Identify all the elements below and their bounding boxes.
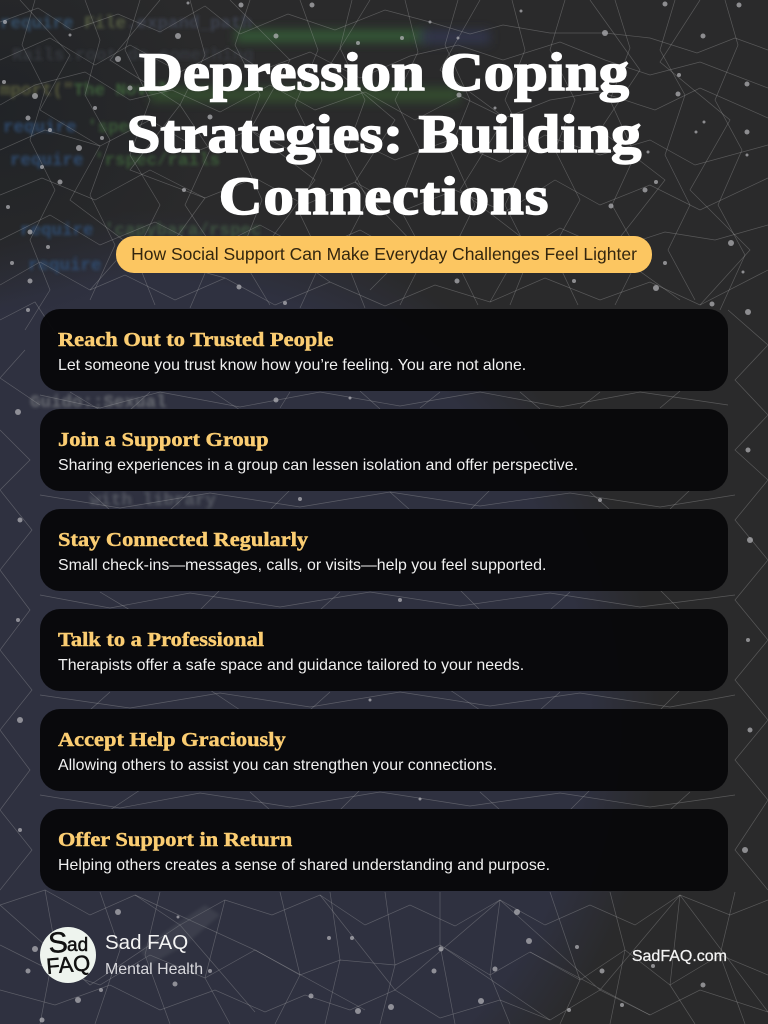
icon: Sad FAQ logo: S — [47, 927, 69, 960]
panel: accept help: Allowing others to assist you can strengthen your connections. — [58, 757, 497, 774]
panel: reach out: Let someone you trust know how you’re feeling. You are not alone. — [58, 357, 526, 374]
background: blurred code and network mesh: Rails.root do_something — [12, 46, 254, 66]
panel: offer support: Offer Support in Return — [58, 829, 292, 851]
background: blurred code and network mesh: require 'capybara/rspec — [20, 221, 262, 241]
panel: support group — [40, 409, 728, 491]
title — [127, 42, 642, 226]
panel: support group: Sharing experiences in a group can lessen isolation and offer perspective. — [58, 457, 578, 474]
panel: professional: Talk to a Professional — [58, 629, 264, 651]
background: blurred code and network mesh: require File.expand_path — [0, 14, 252, 34]
footer brand — [105, 931, 203, 978]
background: blurred code and network mesh: require — [28, 256, 102, 276]
background: blurred code and network mesh: Guido::Sexual — [30, 393, 167, 413]
subtitle pill: How Social Support Can Make Everyday Challenges Feel Lighter — [131, 244, 637, 264]
panel: accept help: Accept Help Graciously — [58, 729, 286, 751]
title: Connections — [219, 166, 549, 226]
footer website: SadFAQ.com — [632, 948, 727, 965]
subtitle pill — [116, 236, 652, 273]
title: Strategies: Building — [127, 104, 641, 164]
panel: professional: Therapists offer a safe space and guidance tailored to your needs. — [58, 657, 524, 674]
panel: stay connected — [40, 509, 728, 591]
panel: support group: Join a Support Group — [58, 429, 269, 451]
footer brand: Sad FAQ — [105, 931, 188, 954]
icon: Sad FAQ logo: FAQ — [45, 950, 91, 979]
panel: offer support: Helping others creates a sense of shared understanding and purpose. — [58, 857, 550, 874]
panel: stay connected: Stay Connected Regularly — [58, 529, 308, 551]
panel: reach out — [40, 309, 728, 391]
panel: professional — [40, 609, 728, 691]
icon: Sad FAQ logo: ad — [67, 935, 88, 956]
background: blurred code and network mesh: require 'rspec/rails — [10, 151, 220, 171]
icon: Sad FAQ logo — [40, 927, 96, 983]
background: blurred code and network mesh: mport("The Novel — [0, 81, 168, 101]
panel: reach out: Reach Out to Trusted People — [58, 329, 333, 351]
background: blurred code and network mesh: with_library — [90, 491, 217, 511]
panel: offer support — [40, 809, 728, 891]
title: Depression Coping — [139, 42, 629, 102]
footer brand: Mental Health — [105, 961, 203, 978]
background: blurred code and network mesh: require 'spec — [3, 118, 140, 138]
panel: accept help — [40, 709, 728, 791]
panel: stay connected: Small check-ins—messages, calls, or visits—help you feel supported. — [58, 557, 546, 574]
